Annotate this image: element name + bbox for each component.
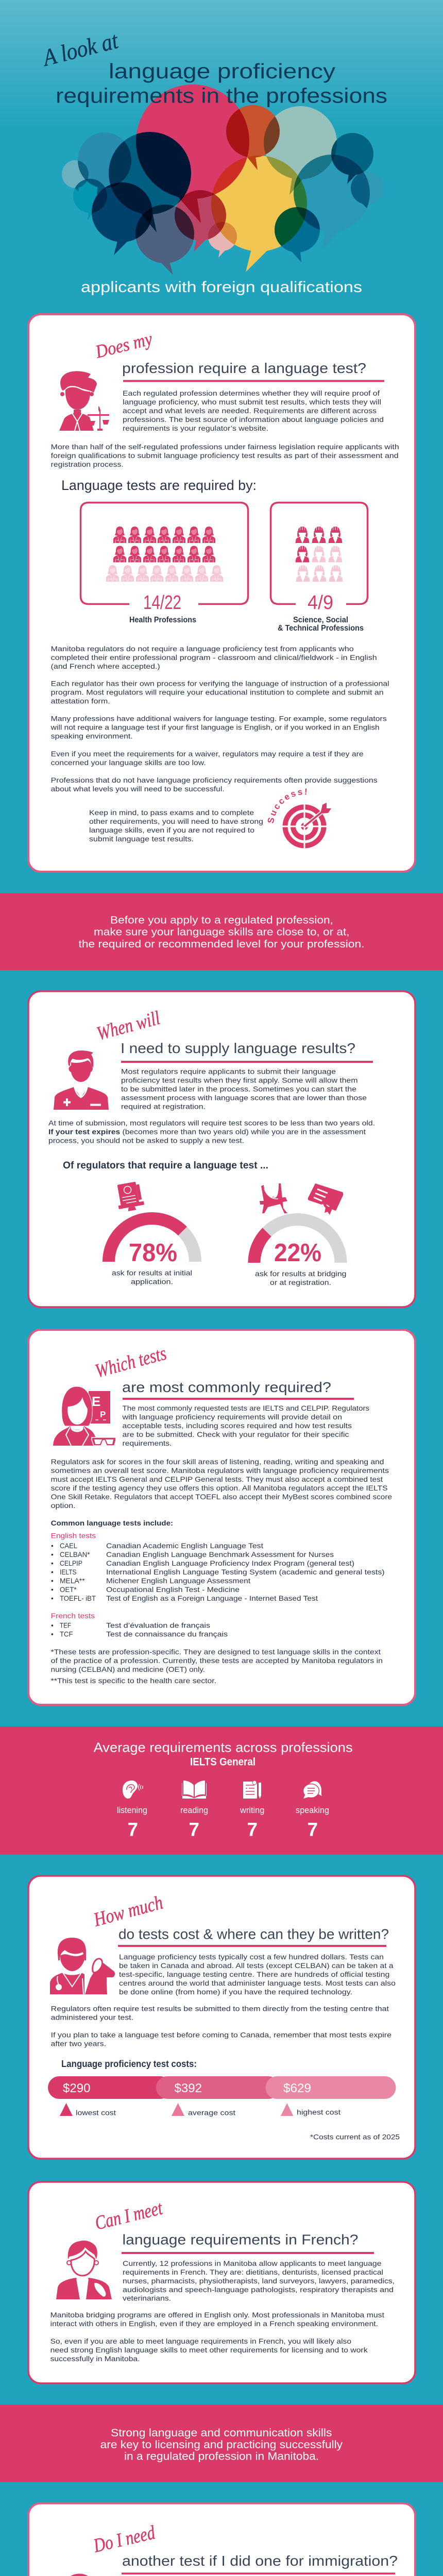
heading: How much: [91, 1892, 165, 1931]
panel: does my profession require a language test: [27, 313, 416, 873]
reading score: reading: [180, 1805, 208, 1815]
title: language proficiency: [109, 59, 336, 83]
footnotes: *These tests are profession-specific. They are designed to test language skills in the context: [51, 1648, 381, 1656]
chart: test cost bar: $629: [283, 2081, 311, 2095]
intro text: accept and what levels are needed. Requirements are different across: [123, 407, 377, 415]
chart: science, social and technical professions 4 of 9: 4/9: [308, 592, 333, 614]
listening score: [117, 1781, 147, 1840]
text block: english still needed: [50, 2311, 384, 2363]
text block: [119, 1953, 396, 1996]
list: common language tests: CELPIP: [60, 1560, 82, 1567]
icon: online application: [115, 1181, 145, 1213]
title: [39, 27, 387, 108]
heading: [91, 1892, 389, 1947]
banner: strong language skills: in a regulated profession in Manitoba.: [124, 2450, 319, 2463]
heading: do tests cost & where can they be written?: [118, 1926, 389, 1942]
list: common language tests: Test d’évaluation de français: [106, 1622, 210, 1630]
list: common language tests: •: [51, 1595, 54, 1602]
footnote: *Costs current as of 2025: [310, 2133, 400, 2141]
icon: optometrist: E: [92, 1394, 100, 1409]
text block: skill areas: must accept IELTS General and CELPIP General tests. They must also accept a combined test: [51, 1476, 383, 1483]
text block: results submission: If you plan to take a language test before coming to Canada, remember that most tests expire: [51, 2031, 391, 2039]
list: common language tests: •: [51, 1551, 54, 1558]
text block: skill areas: option.: [51, 1502, 75, 1510]
text block: waivers: program. Most regulators will require your educational institution to complete and submit an: [51, 688, 384, 696]
text block: waivers: will not require a language test if your first language is English, or if you worked in an English: [50, 724, 380, 732]
text block: waivers: Many professions have additional waivers for language testing. For example, some regulators: [51, 715, 387, 723]
chart: science, social and technical professions 4 of 9: & Technical Professions: [278, 624, 364, 633]
text block: nurses, pharmacists, physiotherapists, land surveyors, lawyers, paramedics,: [123, 2277, 395, 2285]
chart: test cost bar: $290: [63, 2081, 91, 2095]
footnotes: **This test is specific to the health care sector.: [51, 1677, 216, 1685]
text block: english still needed: successfully in Manitoba.: [50, 2355, 140, 2363]
text block: waivers: completed their entire professional program - classroom and clinical/fieldwork - in English: [51, 654, 377, 662]
text block: proficiency test results when they first apply. Some will allow them: [121, 1077, 357, 1084]
intro text: requirements is your regulator’s website.: [123, 425, 268, 432]
chart heading: Language proficiency test costs:: [61, 2059, 197, 2069]
list: common language tests: •: [51, 1577, 54, 1585]
gauge: 78 percent: 78%: [129, 1239, 177, 1267]
list: common language tests: IELTS: [60, 1568, 77, 1576]
legend: cost markers: average cost: [188, 2109, 235, 2117]
text block: waivers: concerned your language skills are too low.: [51, 759, 206, 767]
chart heading: Of regulators that require a language test ...: [63, 1160, 268, 1171]
banner: average requirements: IELTS General: [190, 1756, 255, 1768]
list: common language tests: •: [51, 1542, 54, 1550]
list: common language tests: •: [51, 1568, 54, 1576]
legend: cost markers: lowest cost: [76, 2109, 116, 2117]
title: requirements in the professions: [56, 84, 387, 108]
list: common language tests: Test of English as a Foreign Language - Internet Based Test: [106, 1595, 318, 1602]
icon: optometrist: [53, 1386, 116, 1446]
icon: veterinarian with dog: [50, 1938, 115, 1994]
heading: [94, 1007, 373, 1063]
icon: certificate: [308, 1183, 343, 1215]
chart: test cost bar: $392: [174, 2081, 202, 2095]
text block: skill areas: sometimes an overall test score. Manitoba regulators with language proficiency requirements: [51, 1467, 389, 1475]
text block: waivers: [50, 645, 389, 793]
text block: more than half: foreign qualifications to submit language proficiency test results as part of their assessment and: [51, 452, 399, 460]
text block: test expiry: process, you should not be asked to supply a new test.: [48, 1137, 244, 1145]
writing score: writing: [240, 1805, 264, 1815]
text block: be taken in Canada and abroad. All tests (except CELBAN) can be taken at a: [119, 1962, 394, 1970]
text block: are to be submitted. Check with your regulator for their specific: [123, 1431, 349, 1438]
text block: more than half: registration process.: [51, 461, 124, 468]
list: common language tests: MELA**: [60, 1577, 85, 1585]
text block: centres around the world that administer language tests. Most tests can also: [119, 1979, 396, 1987]
intro text: language proficiency, who must submit test results, which tests they will: [123, 398, 381, 406]
legend: cost markers: highest cost: [297, 2108, 340, 2116]
list: common language tests: Common language tests include:: [51, 1519, 173, 1527]
list: common language tests: TEF: [60, 1622, 71, 1630]
gauge: 78 percent: ask for results at initial: [112, 1269, 192, 1277]
heading: Which tests: [93, 1343, 169, 1382]
list: common language tests: •: [51, 1586, 54, 1594]
callout: keep in mind: [89, 809, 263, 843]
text block: test expiry: If your test expires (becomes more than two years old) while you are in the assessment: [48, 1128, 366, 1136]
list: common language tests: TCF: [60, 1631, 73, 1638]
banner: strong language skills: [0, 2405, 443, 2482]
heading: Can I meet: [93, 2197, 165, 2234]
text block: Currently, 12 professions in Manitoba allow applicants to meet language: [123, 2260, 381, 2267]
text block: The most commonly requested tests are IELTS and CELPIP. Regulators: [123, 1404, 369, 1412]
panel: how much do tests cost: [28, 1876, 415, 2159]
banner: before you apply: make sure your language skills are close to, or at,: [94, 926, 349, 938]
text block: requirements.: [123, 1439, 172, 1447]
panel: when will I need to supply language results: [28, 991, 415, 1307]
gauge: 22 percent: 22%: [274, 1239, 321, 1267]
text block: english still needed: interact with others in English, even if they are employed in a French speaking environment.: [50, 2320, 378, 2328]
chart: health professions 14 of 22: Health Professions: [129, 616, 196, 624]
text block: more than half: [51, 443, 399, 468]
callout: keep in mind: language skills, even if you are not required to: [89, 826, 254, 834]
listening score: listening: [117, 1805, 147, 1815]
heading: [93, 328, 384, 382]
text block: skill areas: [51, 1458, 392, 1510]
footnotes: of the practice of a profession. Currently, these tests are accepted by Manitoba regulators in: [51, 1657, 383, 1665]
list: common language tests: Test de connaissance du français: [106, 1631, 228, 1638]
reading score: [180, 1781, 208, 1840]
list: common language tests: •: [51, 1631, 54, 1638]
text block: waivers: speaking environment.: [51, 733, 133, 740]
banner: before you apply: the required or recommended level for your profession.: [78, 938, 365, 950]
heading: When will: [94, 1007, 162, 1045]
text block: test-specific, language testing centre. There are hundreds of official testing: [119, 1971, 389, 1978]
text block: be done online (from home) if you have the required technology.: [119, 1988, 352, 1996]
heading: [93, 2197, 374, 2254]
panel: do I need another test and where can I improve: [28, 2503, 415, 2576]
text block: [121, 1067, 367, 1111]
speech bubbles illustration: [62, 84, 384, 275]
text block: more than half: More than half of the self-regulated professions under fairness legislation require applicants with: [51, 443, 399, 451]
text block: waivers: about what levels you will need to be successful.: [51, 785, 225, 793]
heading: Does my: [93, 328, 155, 362]
list: common language tests: Canadian English Language Benchmark Assessment for Nurses: [106, 1551, 334, 1558]
chart: science, social and technical professions 4 of 9: [271, 503, 368, 633]
text block: requirements in French. They are: dietitians, denturists, licensed practical: [123, 2268, 383, 2276]
writing score: [240, 1781, 264, 1840]
list: common language tests: Canadian English Language Proficiency Index Program (general test): [106, 1560, 354, 1567]
chart: health professions 14 of 22: [80, 503, 248, 624]
text block: waivers: Professions that do not have language proficiency requirements often provide suggestions: [51, 776, 378, 784]
list: common language tests: Occupational English Test - Medicine: [106, 1586, 240, 1594]
callout: keep in mind: submit language test results.: [89, 835, 194, 843]
list: common language tests: English tests: [51, 1532, 96, 1540]
callout: keep in mind: other requirements, you will need to have strong: [89, 818, 263, 825]
callout: keep in mind: Keep in mind, to pass exams and to complete: [89, 809, 254, 817]
banner: before you apply: [0, 893, 443, 970]
heading: [91, 2521, 398, 2574]
list: common language tests: •: [51, 1560, 54, 1567]
text block: Most regulators require applicants to submit their language: [121, 1067, 336, 1076]
chart: science, social and technical professions 4 of 9: Science, Social: [293, 616, 348, 624]
chart: health professions 14 of 22: 14/22: [143, 592, 181, 614]
text block: waivers: Even if you meet the requirements for a waiver, regulators may require a test if they are: [51, 750, 364, 758]
banner: before you apply: Before you apply to a regulated profession,: [110, 914, 333, 926]
list: common language tests: International English Language Testing System (academic and general tests): [106, 1568, 385, 1576]
subtitle: applicants with foreign qualifications: [81, 279, 362, 296]
icon: optometrist: P: [100, 1410, 106, 1419]
banner: average requirements: [0, 1726, 443, 1855]
icon: health professional: [56, 2241, 112, 2299]
text block: english still needed: Manitoba bridging programs are offered in English only. Most professionals in Manitoba must: [50, 2311, 384, 2319]
footnotes: nursing (CELBAN) and medicine (OET) only.: [51, 1666, 205, 1673]
intro text: Each regulated profession determines whether they will require proof of: [123, 389, 380, 397]
title: A look at: [39, 27, 121, 71]
text block: results submission: [51, 2005, 391, 2048]
icon: doctor: [54, 2574, 106, 2576]
icon: nurse: [54, 1050, 109, 1110]
list: common language tests: French tests: [51, 1612, 95, 1620]
text block: [123, 2260, 395, 2302]
text block: results submission: administered your test.: [51, 2014, 133, 2022]
text block: english still needed: need strong English language skills to meet other requirements for licensing and to work: [50, 2346, 368, 2354]
text block: acceptable tests, including scores required and how test results: [123, 1422, 352, 1430]
list: common language tests: TOEFL- iBT: [60, 1595, 96, 1602]
listening score: 7: [128, 1819, 138, 1840]
gauge: 22 percent: ask for results at bridging: [255, 1270, 346, 1278]
text block: required at registration.: [121, 1103, 206, 1111]
text block: test expiry: [48, 1119, 375, 1145]
text block: audiologists and speech-language pathologists, respiratory therapists and: [123, 2286, 394, 2294]
text block: english still needed: So, even if you are able to meet language requirements in French, you will likely also: [50, 2337, 351, 2345]
text block: waivers: attestation form.: [51, 697, 110, 705]
text block: skill areas: One Skill Retake. Regulators that accept TOEFL also accept their MyBest scores combined score: [51, 1493, 392, 1501]
text block: veterinarians.: [123, 2295, 171, 2302]
gauge: 22 percent: or at registration.: [270, 1279, 331, 1286]
list: common language tests: Michener English Language Assessment: [106, 1577, 250, 1585]
reading score: 7: [189, 1819, 199, 1840]
icon: lawyer with scales: [59, 371, 109, 431]
text block: skill areas: score if the testing agency they use offers this option. All Manitoba regulators accept the IELTS: [51, 1484, 388, 1492]
heading: language requirements in French?: [123, 2232, 359, 2248]
text block: Language proficiency tests typically cost a few hundred dollars. Tests can: [119, 1953, 384, 1961]
text block: skill areas: Regulators ask for scores in the four skill areas of listening, reading, writing and speaking and: [51, 1458, 384, 1466]
panel: which tests are most commonly required: [28, 1330, 415, 1705]
banner: strong language skills: are key to licensing and practicing successfully: [100, 2438, 343, 2451]
speaking score: [296, 1781, 329, 1840]
text block: waivers: (and French where accepted.): [51, 663, 160, 670]
text block: waivers: Each regulator has their own process for verifying the language of instruction of a professional: [51, 680, 389, 687]
list: common language tests: CAEL: [60, 1542, 77, 1550]
text block: results submission: Regulators often require test results be submitted to them directly from the testing centre that: [51, 2005, 389, 2013]
heading: [93, 1343, 354, 1400]
chart: test cost bar: [48, 2076, 396, 2099]
gauge: 78 percent: application.: [131, 1278, 173, 1286]
list: common language tests: •: [51, 1622, 54, 1630]
heading: I need to supply language results?: [121, 1040, 355, 1056]
list: common language tests: OET*: [60, 1586, 77, 1594]
heading: profession require a language test?: [122, 360, 366, 376]
footnotes: [51, 1648, 383, 1685]
text block: waivers: Manitoba regulators do not require a language proficiency test from applicants who: [51, 645, 354, 653]
text block: with language proficiency requirements will provide detail on: [122, 1413, 342, 1421]
list: common language tests: [51, 1519, 385, 1638]
heading: are most commonly required?: [122, 1379, 331, 1395]
text block: [122, 1404, 369, 1447]
banner: average requirements: Average requirements across professions: [94, 1739, 353, 1755]
intro text: [123, 389, 384, 432]
legend: cost markers: [60, 2103, 340, 2117]
icon: target with arrow and success: Success!: [268, 788, 307, 823]
text block: to be submitted later in the process. Sometimes you can start the: [121, 1085, 356, 1093]
chart heading: Language tests are required by:: [61, 478, 257, 493]
intro text: professions. The best source of information about language policies and: [123, 416, 384, 423]
gauge: 78 percent: [103, 1212, 201, 1286]
text block: assessment process with language scores that are lower than those: [121, 1094, 367, 1101]
heading: another test if I did one for immigration?: [122, 2553, 398, 2569]
list: common language tests: Canadian Academic English Language Test: [106, 1542, 263, 1550]
text block: test expiry: At time of submission, most regulators will require test scores to be less than two years old.: [48, 1119, 375, 1127]
gauge: 22 percent: [248, 1213, 347, 1286]
panel: can I meet language requirements in French: [28, 2182, 415, 2383]
speaking score: 7: [307, 1819, 318, 1840]
writing score: 7: [247, 1819, 258, 1840]
icon: bridge: [260, 1183, 287, 1213]
icon: target with arrow and success: [268, 788, 331, 848]
list: common language tests: CELBAN*: [60, 1551, 90, 1558]
text block: results submission: after two years.: [51, 2040, 106, 2048]
banner: strong language skills: Strong language and communication skills: [111, 2427, 332, 2439]
speaking score: speaking: [296, 1805, 329, 1815]
heading: Do I need: [91, 2521, 158, 2557]
